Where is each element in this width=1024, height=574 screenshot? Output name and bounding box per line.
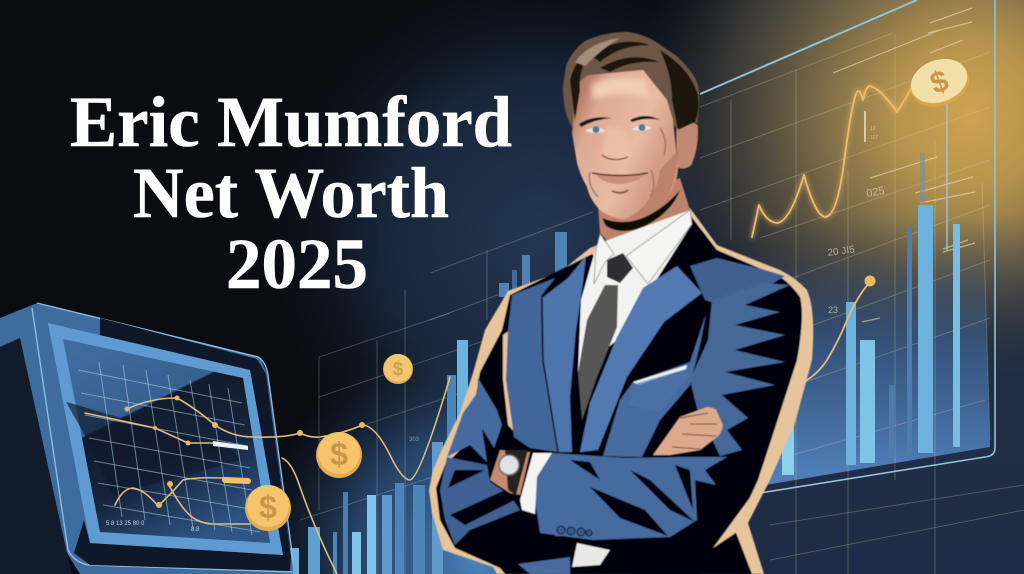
axis labels: 117 — [870, 135, 878, 141]
forearm folds — [570, 460, 695, 536]
chin shadow — [602, 190, 680, 231]
right shoulder — [690, 258, 785, 305]
cream strip — [503, 330, 519, 437]
icon: coin on monitor: $ — [259, 489, 277, 525]
lower cuff — [572, 543, 610, 567]
bars — [782, 153, 960, 475]
central bars — [283, 232, 567, 574]
axis labels: 025 — [865, 185, 886, 200]
screen shadow band — [66, 402, 240, 495]
suit black base — [436, 215, 802, 574]
icon: watch — [499, 450, 528, 495]
central grid lines — [300, 212, 593, 574]
icon: small coin — [383, 354, 413, 384]
person: man in blue suit — [429, 32, 813, 574]
axis labels: 12 — [870, 126, 876, 132]
screen labels: 8.8 — [191, 527, 200, 533]
short accent lines — [833, 8, 975, 322]
screen labels: 5 8 13 25 80 0 — [106, 521, 145, 527]
cream wedge — [713, 480, 763, 548]
screen border — [48, 323, 283, 555]
chart: central bars and grid — [283, 212, 593, 574]
title line 1: Eric Mumford — [70, 82, 512, 162]
panel: right financial chart — [700, 0, 1024, 574]
panel body — [760, 182, 990, 486]
screen labels — [106, 521, 200, 533]
cuff — [520, 453, 552, 514]
lower sleeve — [518, 557, 570, 574]
hair highlight — [575, 38, 620, 66]
title line 3: 2025 — [226, 224, 368, 304]
bezel highlight — [32, 303, 293, 572]
axis labels: 23 — [828, 305, 838, 315]
icon: center coin: $ — [330, 436, 348, 472]
hair back — [563, 32, 699, 132]
left sleeve lower — [440, 457, 520, 545]
forehead highlight — [592, 78, 650, 100]
icon: dollar coin top right — [904, 51, 976, 115]
screen curves — [85, 377, 450, 574]
wrist — [490, 450, 530, 495]
sleeve buttons — [555, 522, 593, 536]
right lapel — [580, 266, 702, 452]
screen — [63, 339, 270, 543]
dark bezel — [74, 318, 291, 571]
eyes — [585, 124, 652, 133]
monitor side — [0, 338, 72, 574]
left lapel — [542, 256, 586, 452]
eyebrows — [579, 116, 660, 127]
pointer line — [946, 103, 948, 250]
hand — [653, 407, 723, 455]
icon: dollar coin top right: $ — [926, 64, 953, 101]
shirt — [578, 210, 692, 372]
icon: center coin — [316, 432, 362, 478]
screen grid — [78, 362, 260, 535]
data point — [864, 276, 876, 286]
axis labels: 20 JI5 — [827, 244, 856, 259]
suit outline — [429, 208, 813, 574]
left chest — [506, 278, 558, 452]
curve nodes — [124, 396, 365, 508]
hair dark — [570, 42, 699, 130]
pocket square — [633, 365, 687, 385]
collar — [594, 210, 692, 284]
axis labels — [827, 126, 886, 315]
right sleeve highlights — [690, 283, 790, 456]
gold trend line — [752, 86, 912, 385]
title line 2: Net Worth — [133, 153, 449, 233]
title — [70, 82, 512, 304]
panel frame — [700, 0, 995, 493]
icon: coin on monitor — [245, 485, 291, 531]
mouth — [592, 173, 648, 193]
jaw shadow — [625, 150, 678, 219]
monitor frame — [0, 303, 293, 574]
right ear — [676, 122, 698, 169]
nose — [602, 125, 630, 161]
face — [572, 70, 678, 219]
panel: left monitor — [0, 303, 450, 574]
neck — [598, 178, 690, 252]
small label: 303 — [409, 437, 420, 443]
icon: small coin: $ — [393, 359, 404, 380]
grid lines — [700, 33, 1024, 574]
crossed forearm — [535, 453, 727, 540]
cheek lines — [589, 128, 665, 197]
left sleeve upper — [447, 378, 502, 462]
right chest — [603, 314, 706, 457]
glow bar — [225, 480, 248, 481]
white indicator bar — [213, 441, 248, 450]
tie — [578, 253, 633, 420]
